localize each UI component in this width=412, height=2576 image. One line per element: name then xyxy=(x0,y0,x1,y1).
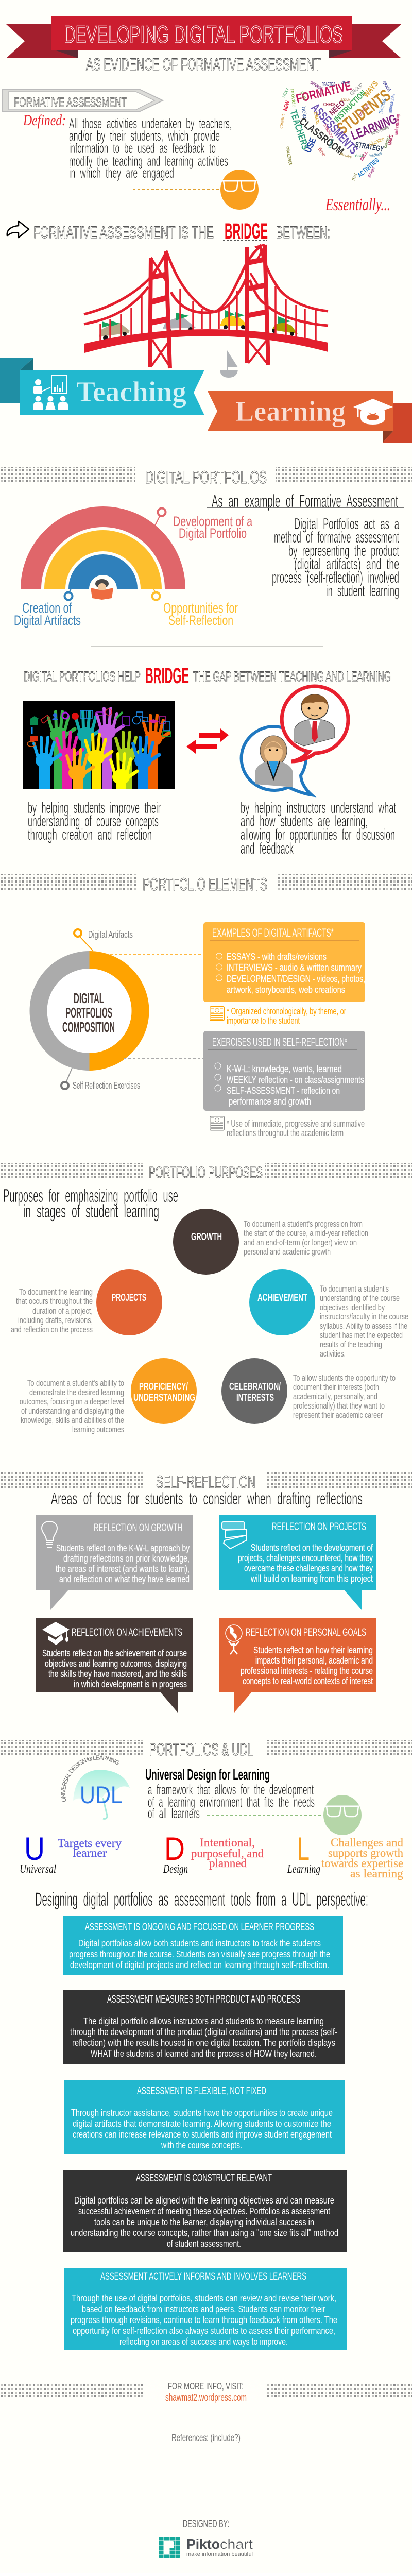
UDL: universal: Targets every xyxy=(58,1837,122,1850)
word cloud speech bubble: data xyxy=(355,153,364,158)
digital artifacts pin xyxy=(74,929,133,951)
logo: piktochart 1: chart xyxy=(220,2536,253,2552)
icon: child reading xyxy=(91,579,113,600)
purpose: proficiency: outcomes, focusing on a deeper level xyxy=(20,1397,124,1406)
purpose: proficiency: demonstrate the desired learning xyxy=(29,1387,124,1397)
bubble: reflection on growth: drafting reflections on prior knowledge, xyxy=(63,1553,190,1564)
footer: more info xyxy=(0,2381,412,2403)
section header: self-reflection xyxy=(0,1472,412,1492)
word cloud speech bubble: process xyxy=(357,102,371,116)
purpose: growth: the start of the course, a mid-year reflection xyxy=(244,1228,368,1238)
box: informs and involves: Through the use of digital portfolios, students can review and revise their work, xyxy=(72,2293,336,2303)
rainbow diagram: Self-Reflection xyxy=(168,613,233,628)
UDL: design xyxy=(163,1831,264,1875)
purpose: achievement: ACHIEVEMENT xyxy=(258,1292,307,1303)
bubble: reflection on growth: REFLECTION ON GROWTH xyxy=(94,1522,182,1534)
section header: portfolio elements: PORTFOLIO ELEMENTS xyxy=(143,875,267,894)
purposes intro: in stages of student learning xyxy=(23,1200,159,1222)
word cloud speech bubble: TEACHERS xyxy=(287,109,311,151)
purpose: proficiency: of understanding and displaying the xyxy=(21,1406,124,1416)
box: ongoing assessment: progress throughout the course. Students can visually see progress through the xyxy=(69,1949,330,1959)
icon: books xyxy=(222,1522,246,1549)
rainbow diagram: Digital Artifacts xyxy=(14,613,81,628)
self reflection pin xyxy=(61,1068,140,1091)
donut chart: DIGITAL xyxy=(74,990,104,1006)
self reflection pin: Self Reflection Exercises xyxy=(73,1080,140,1091)
purposes intro: Purposes for emphasizing portfolio use xyxy=(3,1185,178,1206)
logo: piktochart 1 xyxy=(159,2536,253,2558)
word cloud speech bubble: CHALLENGES xyxy=(285,146,293,165)
purpose: celebration: academically, personally, and xyxy=(293,1392,377,1401)
rainbow diagram xyxy=(14,506,253,628)
students caption: understanding of course concepts xyxy=(28,812,159,830)
box: ongoing assessment: Digital portfolios allow both students and instructors to track the students xyxy=(78,1938,321,1948)
section header: portfolios and UDL xyxy=(0,1740,412,1759)
box: ongoing assessment: development of digital projects and reflect on learning through self-reflection. xyxy=(70,1960,329,1970)
references: References: (include?) xyxy=(171,2433,241,2444)
teaching banner: Teaching xyxy=(76,376,186,408)
bubble: reflection on growth: the areas of interest (and wants to learn), xyxy=(56,1564,190,1574)
card: self-reflection exercises: performance and growth xyxy=(229,1096,311,1107)
box: product and process xyxy=(63,1990,345,2064)
word cloud speech bubble: DIFFERENT xyxy=(310,80,323,91)
word cloud speech bubble: TEACHING xyxy=(378,98,388,115)
formative assessment arrow label: FORMATIVE ASSESSMENT xyxy=(14,95,127,110)
purpose: growth: GROWTH xyxy=(191,1231,222,1243)
speech bubbles with instructors xyxy=(242,686,348,795)
bubble: reflection on achievements: objectives and learning outcomes, displaying xyxy=(45,1658,187,1669)
UDL definition: Universal Design for Learning xyxy=(145,1767,270,1783)
note: organized chronologically xyxy=(210,1006,346,1026)
word cloud speech bubble: predict xyxy=(382,135,391,149)
word cloud speech bubble: SKILL xyxy=(359,150,369,162)
bubble: reflection on projects: overcame these challenges and how they xyxy=(244,1563,373,1573)
box: product and process: WHAT the students of learned and the process of HOW they learned. xyxy=(91,2048,317,2059)
logo: piktochart 1: Pikto xyxy=(186,2536,220,2552)
UDL umbrella logo xyxy=(61,1755,130,1820)
bubble: reflection on projects: will build on learning from this project xyxy=(250,1573,373,1584)
word cloud speech bubble: CHECK xyxy=(323,102,336,108)
teaching banner xyxy=(0,358,204,415)
box: flexible: Through instructor assistance, students have the opportunities to create unique xyxy=(71,2108,333,2118)
UDL: universal: learner xyxy=(73,1846,107,1859)
UDL: learning: as learning xyxy=(350,1867,404,1880)
designed by: DESIGNED BY: xyxy=(183,2519,229,2530)
definition text: information to be used as feedback to xyxy=(69,140,216,156)
purposes intro xyxy=(3,1185,178,1222)
UDL: design: Intentional, xyxy=(200,1836,255,1849)
box: construct relevant: of student assessment. xyxy=(167,2239,241,2249)
box: construct relevant: Digital portfolios can be aligned with the learning objectives and can measure xyxy=(74,2195,334,2206)
definition text: and/or by their students, which provide xyxy=(69,128,220,144)
purpose: proficiency: learning outcomes xyxy=(72,1425,124,1434)
section header: portfolio purposes xyxy=(0,1163,412,1181)
card: examples of digital artifacts: ESSAYS - with drafts/revisions xyxy=(227,952,327,962)
bubble: reflection on growth xyxy=(36,1515,193,1610)
icon: green glasses circle xyxy=(207,1795,362,1835)
icon: two-way red arrows xyxy=(186,728,229,754)
word cloud speech bubble: GROUP xyxy=(349,82,365,97)
digital portfolios description xyxy=(272,515,399,600)
word cloud speech bubble: GRADE xyxy=(381,80,392,92)
card: self-reflection exercises: K-W-L: knowledge, wants, learned xyxy=(227,1064,342,1074)
purpose: growth: To document a student's progression from xyxy=(244,1219,363,1229)
word cloud speech bubble: achievement xyxy=(370,125,390,137)
word cloud speech bubble: PRACTICE xyxy=(322,82,335,87)
donut chart: PORTFOLIOS xyxy=(66,1005,112,1021)
UDL definition xyxy=(145,1767,315,1821)
UDL: learning: Learning xyxy=(287,1862,320,1875)
cars xyxy=(99,310,298,341)
sailboat xyxy=(220,350,238,378)
icon: light bulb xyxy=(42,1521,57,1547)
learning banner xyxy=(208,391,412,443)
word cloud speech bubble: education xyxy=(368,135,385,148)
icon: figure holding globe xyxy=(226,1625,242,1654)
word cloud speech bubble: ASSESSMENTS xyxy=(308,101,360,157)
box: construct relevant: successful achievement of meeting these objectives. Portfolios as assessment xyxy=(78,2206,330,2216)
UDL: design: D xyxy=(164,1831,185,1867)
bubble: reflection on growth: Students reflect on the K-W-L approach by xyxy=(56,1543,190,1553)
purpose: proficiency: To document a student's ability to xyxy=(27,1378,124,1388)
UDL: learning: towards expertise xyxy=(321,1857,403,1870)
blue bubble xyxy=(242,726,312,795)
UDL: design: purposeful, and xyxy=(191,1847,264,1860)
bridge heading: FORMATIVE ASSESSMENT IS THE xyxy=(33,223,214,242)
purpose: projects: that occurs throughout the xyxy=(16,1296,93,1306)
word cloud speech bubble: NEW xyxy=(282,100,291,112)
UDL: universal xyxy=(20,1831,122,1875)
purpose: celebration xyxy=(221,1358,396,1424)
bridge the gap heading: BRIDGE xyxy=(145,664,189,688)
icon: graduation cap xyxy=(353,399,393,425)
definition text: modify the teaching and learning activities xyxy=(69,153,228,169)
word cloud speech bubble: content xyxy=(278,114,286,129)
purpose: projects xyxy=(11,1269,162,1335)
UDL: design: planned xyxy=(209,1857,247,1870)
rainbow diagram: Opportunities for xyxy=(163,600,238,616)
woman xyxy=(255,736,293,787)
purpose: projects: including drafts, revisions, xyxy=(18,1315,93,1325)
card: examples of digital artifacts xyxy=(203,922,365,1002)
purpose: growth: personal and academic growth xyxy=(244,1247,331,1257)
box: product and process: ASSESSMENT MEASURES BOTH PRODUCT AND PROCESS xyxy=(107,1993,300,2005)
box: flexible: ASSESSMENT IS FLEXIBLE, NOT FIXED xyxy=(137,2085,266,2097)
banner tails xyxy=(6,16,401,58)
box: product and process: The digital portfolio allows instructors and students to measure learning xyxy=(83,2016,324,2026)
box: informs and involves: progress through revisions, continue to learn through feedback from others. The xyxy=(71,2315,337,2325)
bubble: reflection on personal goals: impacts their personal, academic and xyxy=(255,1655,373,1666)
UDL: learning: L xyxy=(297,1831,310,1867)
purpose: achievement: activities. xyxy=(320,1349,346,1359)
bubble: reflection on achievements: REFLECTION ON ACHIEVEMENTS xyxy=(72,1626,182,1638)
formative assessment arrow label xyxy=(2,89,163,112)
box: flexible: creations can increase relevance to students and improve student engagement xyxy=(73,2129,332,2140)
UDL: universal: U xyxy=(24,1831,45,1867)
purpose: proficiency: UNDERSTANDING xyxy=(133,1392,195,1403)
purpose: achievement xyxy=(249,1269,408,1359)
box: informs and involves xyxy=(64,2268,347,2350)
icon: graduation cap xyxy=(42,1622,70,1645)
section header: portfolio purposes: PORTFOLIO PURPOSES xyxy=(149,1163,263,1181)
note: organized chronologically: * Organized chronologically, by theme, or xyxy=(227,1006,346,1016)
purpose: growth xyxy=(173,1209,368,1275)
bubble: reflection on projects xyxy=(219,1515,376,1610)
word cloud speech bubble: understanding xyxy=(393,114,400,135)
section header: portfolio elements xyxy=(0,874,412,894)
word cloud speech bubble: time xyxy=(317,147,327,158)
definition text: in which they are engaged xyxy=(69,165,174,181)
word cloud speech bubble: CLASSROOM xyxy=(297,116,346,157)
word cloud speech bubble: feedback xyxy=(369,151,383,158)
bubble: reflection on personal goals: professional interests - relating the course xyxy=(241,1666,373,1676)
box: flexible: digital artifacts that demonstrate learning. Allowing students to customize the xyxy=(73,2119,331,2129)
word cloud speech bubble: provide xyxy=(289,89,297,108)
note: immediate reflections: reflections throughout the academic term xyxy=(227,1128,344,1138)
raised hands image xyxy=(23,701,175,789)
bridge illustration xyxy=(84,245,328,378)
UDL: learning: Challenges and xyxy=(331,1836,403,1849)
bubble: reflection on achievements: Students reflect on the achievement of course xyxy=(42,1648,187,1658)
box: informs and involves: based on feedback from instructors and peers. Students can monitor their xyxy=(82,2304,325,2314)
UDL: design: Design xyxy=(163,1862,188,1875)
man xyxy=(295,694,335,746)
card: self-reflection exercises: SELF-ASSESSMENT - reflection on xyxy=(227,1086,340,1096)
UDL umbrella logo: UDL xyxy=(80,1781,123,1808)
rainbow diagram: Digital Portfolio xyxy=(179,526,247,541)
UDL: learning xyxy=(287,1831,404,1880)
UDL: universal: Universal xyxy=(20,1862,56,1875)
section header: self-reflection: SELF-REFLECTION xyxy=(156,1472,255,1492)
purpose: celebration: CELEBRATION/ xyxy=(229,1381,281,1393)
word cloud speech bubble: Response xyxy=(322,123,335,140)
purpose: projects: duration of a project, xyxy=(32,1306,93,1316)
bridge the gap heading xyxy=(24,664,391,688)
purpose: proficiency: PROFICIENCY/ xyxy=(139,1381,188,1393)
bubble: reflection on achievements: the skills they have mastered, and the skills xyxy=(48,1669,187,1679)
word cloud speech bubble: groups xyxy=(366,166,376,178)
word cloud speech bubble: NEXT xyxy=(281,87,290,98)
bubble: reflection on personal goals xyxy=(219,1618,376,1713)
bridge heading: BRIDGE xyxy=(225,219,268,244)
icon: glasses circle xyxy=(133,170,259,210)
bubble: reflection on personal goals: Students reflect on how their learning xyxy=(253,1645,373,1655)
word cloud speech bubble: FORMATIVE xyxy=(295,79,353,106)
UDL definition: of all learners xyxy=(148,1805,200,1821)
bubble: reflection on personal goals: concepts to real-world contexts of interest xyxy=(243,1676,373,1686)
card: self-reflection exercises: WEEKLY reflection - on class/assignments xyxy=(227,1075,364,1085)
word cloud speech bubble: USE xyxy=(302,136,318,155)
purpose: achievement: To document a student's xyxy=(320,1284,389,1294)
students caption xyxy=(28,799,161,843)
word cloud speech bubble: work xyxy=(327,137,335,149)
section header: portfolios and UDL: PORTFOLIOS & UDL xyxy=(149,1740,253,1759)
essentially script: Essentially... xyxy=(325,195,390,214)
rainbow diagram: Creation of xyxy=(22,600,72,616)
box: ongoing assessment xyxy=(63,1916,343,1975)
bridge heading: BETWEEN: xyxy=(276,223,330,242)
note: organized chronologically: importance to the student xyxy=(227,1015,300,1026)
footer: more info: FOR MORE INFO, VISIT: xyxy=(168,2381,244,2392)
card: examples of digital artifacts: DEVELOPMENT/DESIGN - videos, photos, xyxy=(227,974,365,984)
purpose: achievement: objectives identified by xyxy=(320,1302,385,1312)
word cloud speech bubble: LESSON xyxy=(340,97,350,102)
digital artifacts pin: Digital Artifacts xyxy=(88,929,133,940)
bubble: reflection on achievements xyxy=(36,1618,193,1713)
footer: more info: shawmat2.wordpress.com xyxy=(165,2392,247,2403)
box: construct relevant: understanding the course concepts, rather than using a "one size fits all" method xyxy=(71,2228,338,2238)
learning banner: Learning xyxy=(235,396,346,428)
donut chart: COMPOSITION xyxy=(62,1019,115,1035)
students caption: by helping students improve their xyxy=(28,799,161,817)
word cloud speech bubble: RESEARCH xyxy=(313,112,320,125)
box: product and process: through the development of the product (digital creations) and the process (self- xyxy=(70,2027,337,2037)
purpose: projects: To document the learning xyxy=(19,1287,93,1297)
purpose: achievement: results of the teaching xyxy=(320,1340,382,1349)
word cloud speech bubble: STRATEGY xyxy=(354,140,384,154)
box: flexible: with the course concepts. xyxy=(161,2140,242,2150)
word cloud speech bubble: help xyxy=(300,106,308,119)
definition text: Defined: xyxy=(23,112,66,129)
icon: curved arrow xyxy=(7,221,29,238)
purpose: projects: and reflection on the process xyxy=(11,1325,93,1334)
definition text xyxy=(23,112,232,181)
word cloud speech bubble: TEXT xyxy=(351,172,358,182)
section header: digital portfolios xyxy=(0,467,412,487)
bubble: reflection on projects: Students reflect on the development of xyxy=(251,1543,373,1553)
bubble: reflection on growth: and reflection on what they have learned xyxy=(59,1574,190,1584)
title banner xyxy=(6,16,401,58)
card: examples of digital artifacts: EXAMPLES OF DIGITAL ARTIFACTS* xyxy=(212,926,334,939)
small subject icons xyxy=(27,709,170,747)
word cloud speech bubble: WAYS xyxy=(362,79,380,99)
box: product and process: reflection) with the results housed in one digital location. The portfolio displays xyxy=(72,2038,335,2048)
donut chart xyxy=(29,929,203,1091)
word cloud speech bubble: NEED xyxy=(328,99,347,117)
bubble: reflection on achievements: in which development is in progress xyxy=(74,1679,187,1689)
word cloud speech bubble: MAKE xyxy=(387,134,394,146)
purpose: proficiency: knowledge, skills and abilities of the xyxy=(21,1415,124,1425)
word cloud speech bubble: monitor xyxy=(339,151,353,160)
note: immediate reflections xyxy=(210,1116,365,1138)
bridge heading xyxy=(7,219,330,244)
box: construct relevant: ASSESSMENT IS CONSTRUCT RELEVANT xyxy=(136,2172,272,2184)
section header: digital portfolios: DIGITAL PORTFOLIOS xyxy=(145,468,267,487)
box: flexible xyxy=(64,2080,345,2154)
box: informs and involves: reflecting on areas of success and ways to improve. xyxy=(119,2336,288,2347)
purpose: growth: and an end-of-term (or longer) view on xyxy=(244,1238,357,1247)
box: construct relevant: tools can be unique to the learner, displaying individual success in xyxy=(94,2217,314,2227)
box: construct relevant xyxy=(63,2170,347,2252)
purpose: proficiency xyxy=(20,1358,197,1434)
bubble: reflection on projects: projects, challenges encountered, how they xyxy=(238,1553,373,1563)
red bubble xyxy=(282,686,348,761)
word cloud speech bubble: INSTRUCTION xyxy=(333,89,368,124)
purpose: celebration: document their interests (both xyxy=(293,1382,379,1392)
instructors caption: and feedback xyxy=(241,839,294,857)
icon: teacher and students xyxy=(33,375,68,410)
UDL: learning: supports growth xyxy=(328,1846,403,1859)
instructors caption xyxy=(241,799,396,857)
card: examples of digital artifacts: INTERVIEWS - audio & written summary xyxy=(227,962,362,973)
word cloud speech bubble: ACTIVITIES xyxy=(356,156,381,179)
word cloud speech bubble: VISUAL xyxy=(341,81,351,86)
word cloud speech bubble: goals xyxy=(300,91,307,101)
word cloud speech bubble xyxy=(278,79,400,182)
purpose: celebration: INTERESTS xyxy=(236,1392,274,1403)
definition text: All those activities undertaken by teachers, xyxy=(69,115,232,131)
logo: piktochart 1: make information beautiful xyxy=(186,2551,253,2557)
card: self-reflection exercises xyxy=(203,1031,365,1111)
card: examples of digital artifacts: artwork, storyboards, web creations xyxy=(227,985,345,995)
bridge the gap heading: DIGITAL PORTFOLIOS HELP xyxy=(24,669,141,684)
rainbow diagram: Development of a xyxy=(173,514,253,529)
box: informs and involves: opportunity for self-reflection also always students to assess their performance, xyxy=(73,2326,335,2336)
students caption: through creation and reflection xyxy=(28,825,152,843)
word cloud speech bubble: approaches xyxy=(387,93,397,114)
purpose: projects: PROJECTS xyxy=(112,1292,146,1303)
UDL umbrella logo: UNIVERSAL DESIGN for LEARNING xyxy=(61,1755,119,1802)
